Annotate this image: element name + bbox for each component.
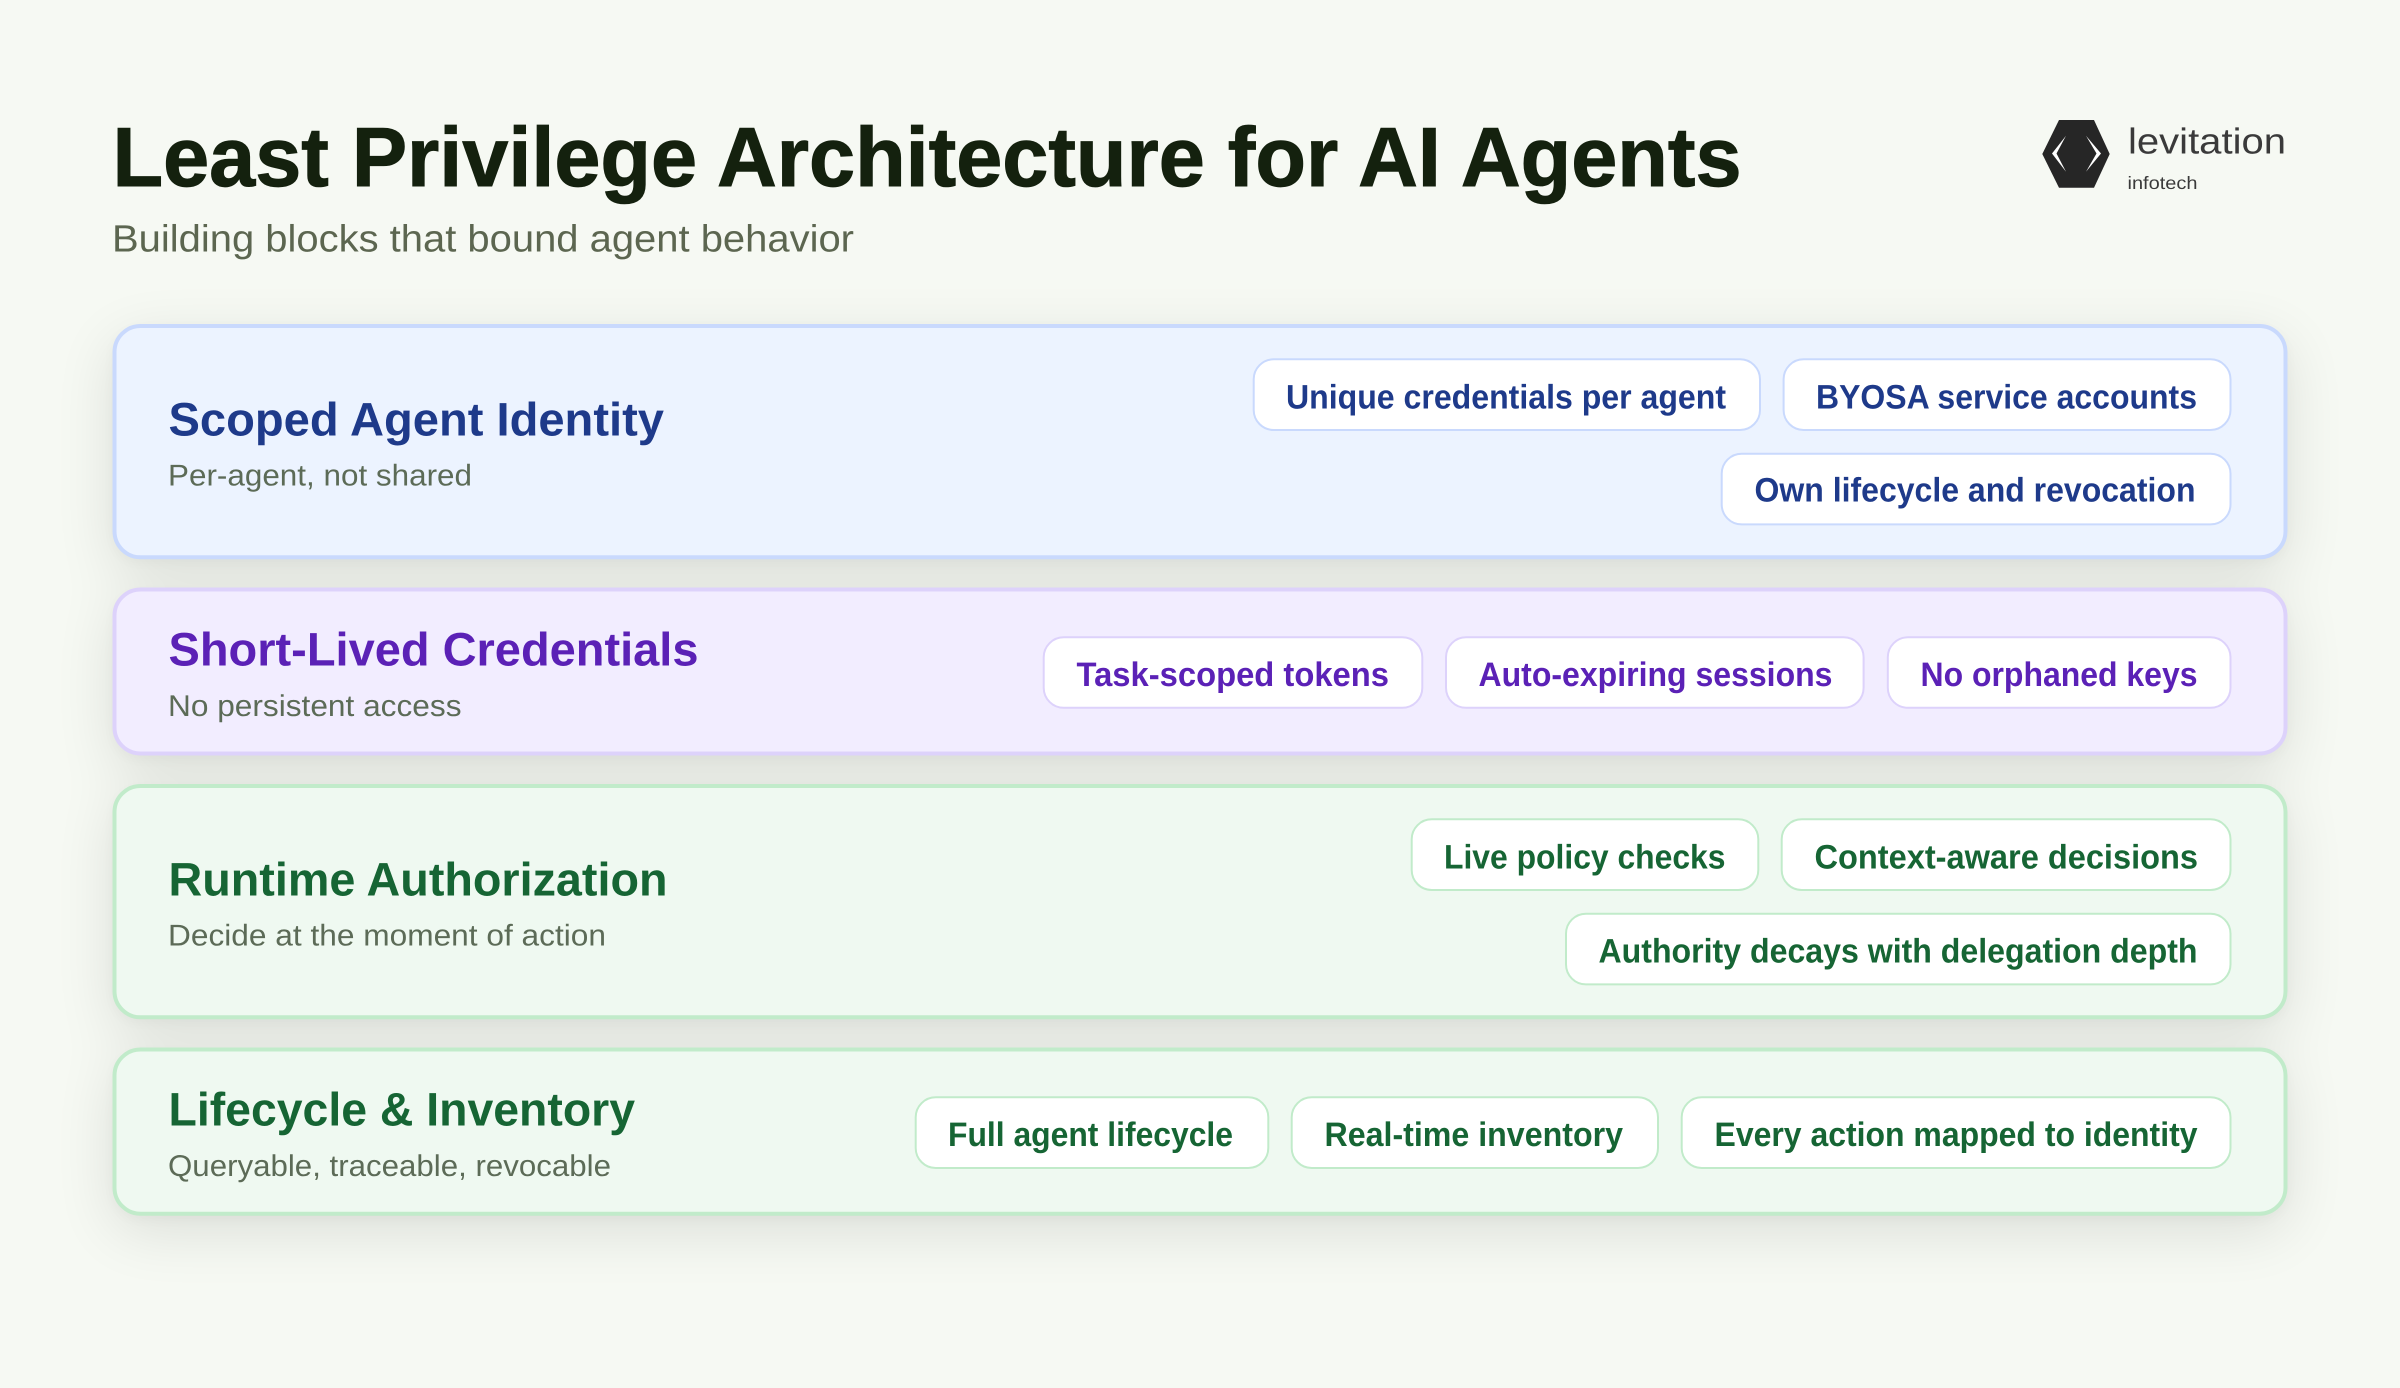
- description: No persistent access: [168, 690, 462, 723]
- logo tagline: infotech: [2128, 173, 2198, 193]
- chip: Full agent lifecycle: Full agent lifecycle: [948, 1116, 1233, 1154]
- subtitle: Building blocks that bound agent behavior: [112, 219, 854, 261]
- chip: Task-scoped tokens: [1044, 637, 1422, 708]
- chip: Task-scoped tokens: Task-scoped tokens: [1076, 656, 1389, 694]
- chip: Own lifecycle and revocation: [1722, 454, 2230, 524]
- chip: Authority decays with delegation depth: Authority decays with delegation depth: [1598, 932, 2198, 970]
- description: Per-agent, not shared: [168, 460, 472, 493]
- description: Queryable, traceable, revocable: [168, 1150, 611, 1183]
- icon: hexagon with chevrons: [2042, 120, 2110, 188]
- chip: Context-aware decisions: Context-aware decisions: [1814, 838, 2198, 876]
- logo wordmark: levitation: [2128, 120, 2286, 161]
- chip: No orphaned keys: No orphaned keys: [1920, 656, 2198, 694]
- chip: Real-time inventory: [1292, 1097, 1658, 1168]
- chip: Auto-expiring sessions: [1446, 637, 1864, 708]
- title: Least Privilege Architecture for AI Agents: [112, 110, 1742, 204]
- chip: Live policy checks: [1412, 819, 1758, 890]
- panel: Lifecycle & Inventory: [114, 1050, 2286, 1214]
- chip: Context-aware decisions: [1782, 819, 2230, 890]
- heading: Lifecycle & Inventory: [168, 1083, 635, 1136]
- heading: Scoped Agent Identity: [168, 393, 664, 446]
- chip: Real-time inventory: Real-time inventory: [1324, 1116, 1623, 1154]
- chip: BYOSA service accounts: BYOSA service accounts: [1816, 378, 2197, 416]
- heading: Short-Lived Credentials: [168, 623, 698, 676]
- chip: Unique credentials per agent: [1254, 359, 1760, 430]
- chip: Every action mapped to identity: Every action mapped to identity: [1714, 1116, 2198, 1154]
- chip: Own lifecycle and revocation: Own lifecycle and revocation: [1754, 472, 2196, 510]
- logo: levitation infotech: [2042, 120, 2286, 193]
- heading: Runtime Authorization: [168, 853, 668, 906]
- chip: BYOSA service accounts: [1784, 359, 2230, 430]
- description: Decide at the moment of action: [168, 920, 606, 953]
- panel: Runtime Authorization: [114, 786, 2286, 1017]
- chip: Unique credentials per agent: Unique credentials per agent: [1286, 378, 1726, 416]
- chip: Authority decays with delegation depth: [1566, 914, 2230, 984]
- chip: Auto-expiring sessions: Auto-expiring sessions: [1478, 656, 1832, 694]
- chip: Every action mapped to identity: [1682, 1097, 2230, 1168]
- chip: Live policy checks: Live policy checks: [1444, 838, 1726, 876]
- chip: No orphaned keys: [1888, 637, 2230, 708]
- panel: Scoped Agent Identity: [114, 326, 2286, 557]
- panel: Short-Lived Credentials: [114, 590, 2286, 754]
- chip: Full agent lifecycle: [916, 1097, 1268, 1168]
